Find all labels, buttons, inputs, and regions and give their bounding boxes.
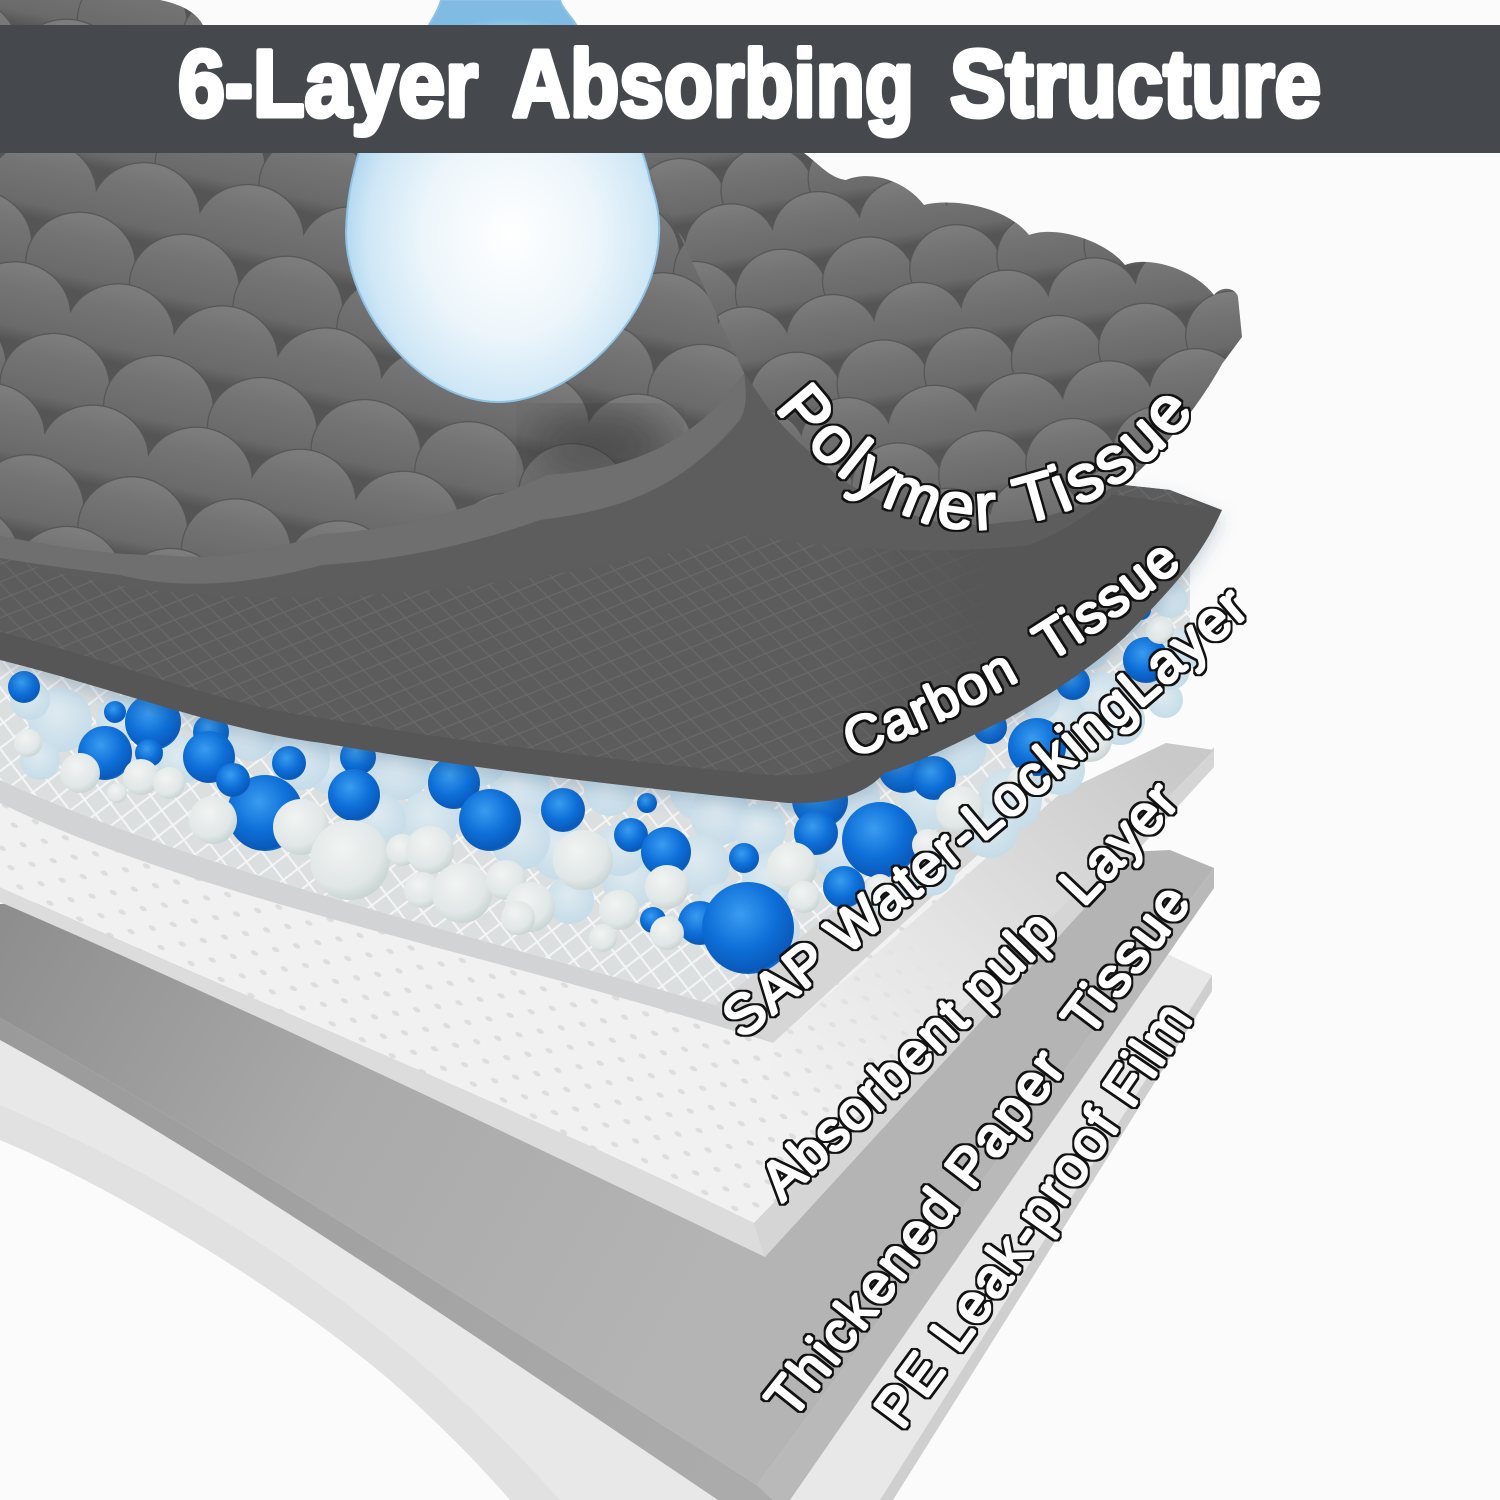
panel: carbon tissue layer (0, 450, 1222, 803)
title: Absorbing (512, 31, 914, 137)
panel: SAP water-locking layer (0, 560, 1202, 1043)
label: Absorbent pulp Layer: Absorbent pulp Layer (764, 780, 1178, 1206)
title: Structure (950, 31, 1321, 137)
curled rim (0, 373, 746, 584)
panel: polymer tissue layer (0, 0, 1260, 600)
label: Carbon Tissue: Carbon Tissue (843, 546, 1180, 756)
pale beads (10, 582, 1202, 950)
tufted surface right (644, 153, 1242, 525)
curled underside (0, 364, 1222, 598)
label: SAP Water-LockingLayer: SAP Water-LockingLayer (722, 588, 1247, 1037)
panel: PE leak-proof film layer (0, 945, 1212, 1500)
label: PE Leak-proof Film: PE Leak-proof Film (871, 1005, 1194, 1430)
label: Thickened Paper Tissue: Thickened Paper Tissue (760, 888, 1190, 1413)
panel: absorbent pulp layer (0, 743, 1214, 1257)
large blue bead (702, 882, 794, 974)
panel: thickened paper tissue layer (0, 850, 1214, 1500)
white beads (14, 616, 1174, 952)
title banner (0, 25, 1500, 153)
title: 6-Layer (178, 31, 478, 137)
icon: water drop (346, 0, 659, 402)
blue beads (8, 600, 1169, 945)
label: Polymer Tissue: Polymer Tissue (775, 380, 1191, 533)
mesh sheet (0, 560, 1190, 1043)
tufted surface left (0, 0, 744, 557)
